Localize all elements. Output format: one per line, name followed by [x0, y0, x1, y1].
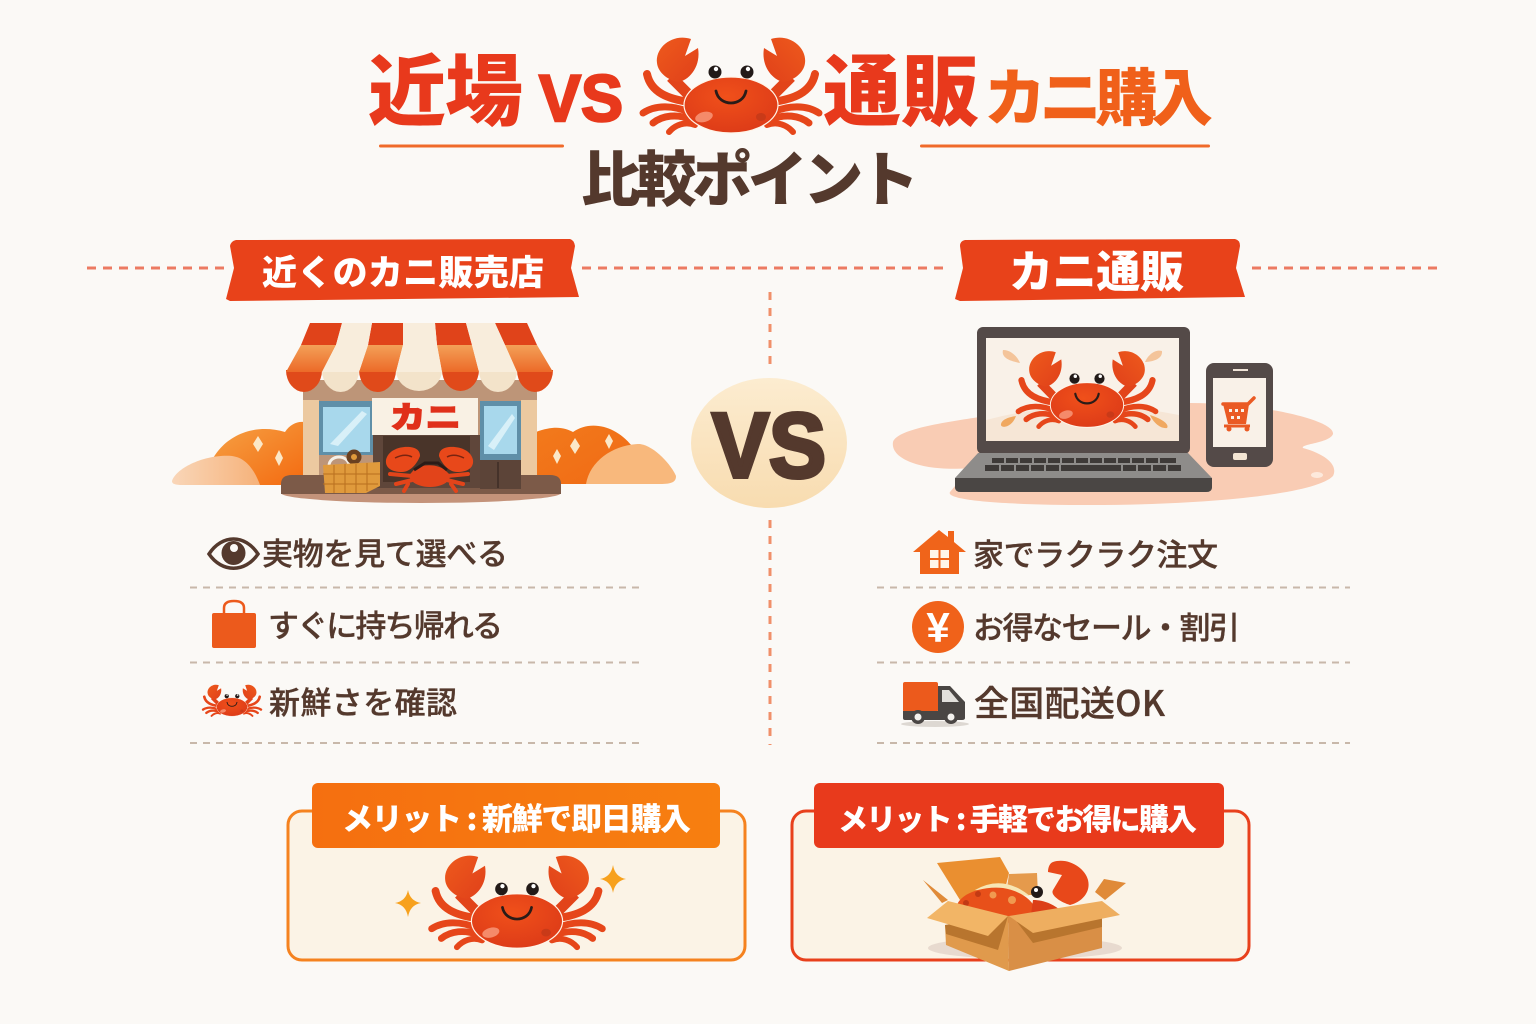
store sign: カニ — [390, 393, 461, 437]
title text: vs: VS — [539, 61, 623, 135]
item: sale and discount: お得なセール・割引 — [973, 603, 1240, 648]
panel: mail-order merit — [792, 783, 1249, 971]
illustration: laptop and phone — [893, 327, 1334, 505]
dashed header lines — [87, 266, 1444, 270]
list: mail-order merits — [901, 530, 1240, 727]
item: order easily from home: 家でラクラク注文 — [973, 530, 1218, 575]
title text: カニ購入: カニ購入 — [984, 48, 1213, 138]
VS badge: VS — [712, 395, 826, 497]
subtitle: 比較ポイント — [581, 132, 919, 219]
peach blob highlight — [1311, 472, 1323, 478]
heading ribbon: left — [226, 239, 579, 301]
merit tab — [814, 783, 1224, 848]
bushes left — [172, 422, 304, 485]
door area — [373, 435, 480, 488]
center dashed divider — [768, 292, 772, 745]
item: check freshness: 新鮮さを確認 — [269, 678, 457, 723]
window left — [319, 401, 373, 455]
merit tab: メリット : 手軽でお得に購入 — [838, 795, 1197, 839]
title underline right — [920, 144, 1210, 148]
list: store merits — [203, 529, 508, 723]
icon: truck — [901, 682, 969, 727]
lower right panel — [480, 460, 521, 489]
heading ribbon: right: カニ通販 — [1009, 236, 1184, 300]
item: nationwide shipping: 全国配送OK — [974, 676, 1166, 727]
store crab — [386, 447, 473, 491]
list dividers left — [190, 588, 643, 743]
window right — [480, 401, 521, 460]
heading ribbon: right — [955, 236, 1245, 301]
ground shadow — [281, 483, 561, 503]
panel: store merit — [288, 783, 745, 960]
icon: shopping bag — [212, 601, 256, 648]
store sign — [372, 393, 478, 437]
peach blob — [893, 403, 1334, 505]
VS badge — [691, 378, 847, 508]
merit tab — [312, 783, 720, 848]
icon: yen coin — [912, 601, 964, 653]
icon: eye — [209, 539, 258, 568]
illustration: store — [172, 323, 676, 503]
heading ribbon: left: 近くのカニ販売店 — [262, 245, 544, 296]
item: take home right away: すぐに持ち帰れる — [268, 601, 503, 646]
icon: title crab — [643, 38, 819, 133]
bushes right — [536, 426, 676, 484]
awning — [286, 323, 553, 392]
icon: yen coin: ¥ — [926, 604, 950, 651]
icon: crab with sparkles — [395, 856, 626, 948]
title underline left — [379, 144, 564, 148]
laptop lid — [977, 327, 1190, 454]
icon: house — [913, 530, 966, 574]
icon: cardboard box with crab — [923, 857, 1126, 971]
phone — [1206, 363, 1273, 467]
store base — [281, 475, 561, 494]
building — [303, 380, 537, 475]
title — [368, 30, 1213, 219]
icon: shopping cart — [1223, 398, 1254, 432]
screen sparkles — [1001, 350, 1168, 428]
icon: small crab — [203, 685, 261, 716]
title text: 近場: 近場 — [368, 30, 523, 142]
item: see the real thing: 実物を見て選べる — [262, 529, 508, 574]
merit tab: メリット : 新鮮で即日購入 — [342, 794, 691, 839]
basket — [323, 450, 380, 493]
list dividers right — [877, 588, 1350, 743]
laptop base — [955, 453, 1212, 492]
title text: 通販: 通販 — [823, 30, 979, 142]
screen crab — [1018, 351, 1156, 427]
